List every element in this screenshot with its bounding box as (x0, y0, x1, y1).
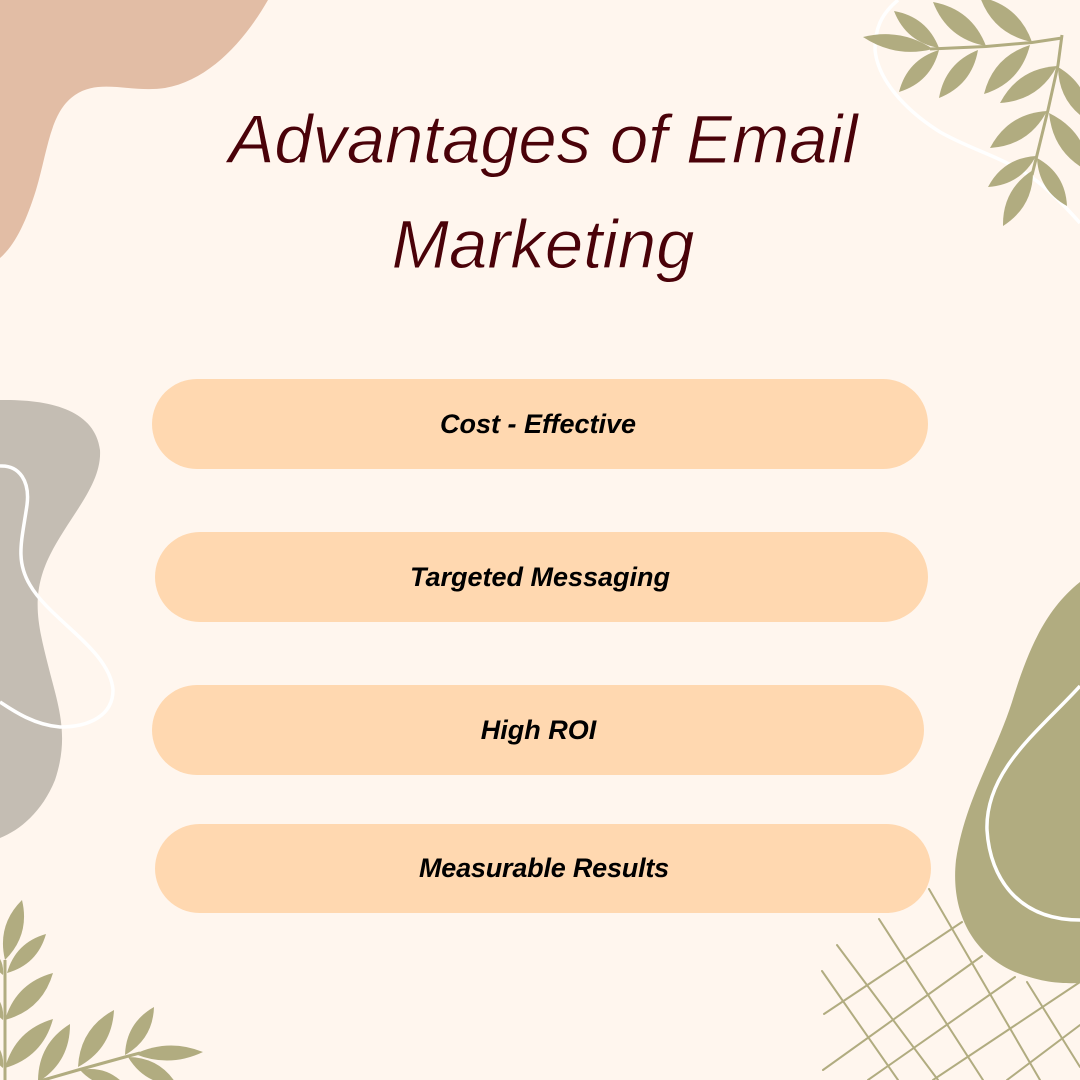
leaf sprig: top right (863, 0, 1080, 226)
pill: High ROI (152, 685, 924, 775)
pill: Targeted Messaging (155, 532, 928, 622)
title: Marketing (392, 206, 694, 283)
pill: Measurable Results: Measurable Results (419, 853, 669, 883)
white curve: top right (875, 0, 1080, 223)
leaf sprig: bottom left (0, 900, 203, 1080)
pill: Targeted Messaging: Targeted Messaging (410, 562, 670, 592)
white curve: left (0, 466, 113, 727)
pill: Cost - Effective (152, 379, 928, 469)
pill: Cost - Effective: Cost - Effective (440, 409, 636, 439)
blob: grey left (0, 400, 100, 838)
line grid bottom right (822, 889, 1080, 1080)
pill: Measurable Results (155, 824, 931, 913)
title (226, 101, 859, 283)
blob: olive right (955, 582, 1080, 983)
pill: High ROI: High ROI (481, 715, 596, 745)
blob: peach top left (0, 0, 268, 258)
title: Advantages of Email (228, 101, 858, 178)
white curve: right (987, 686, 1080, 920)
